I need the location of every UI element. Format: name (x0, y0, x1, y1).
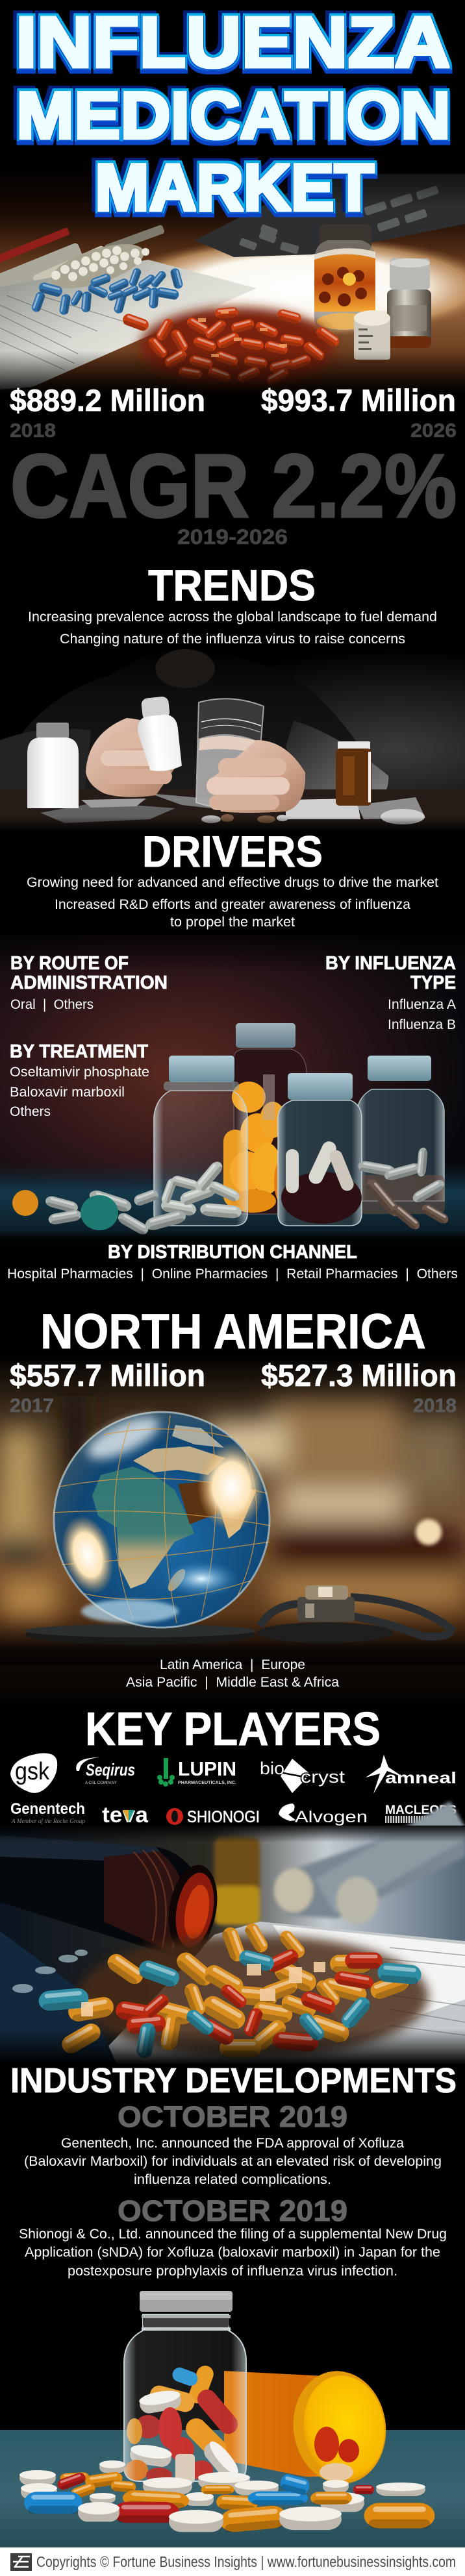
drivers heading: DRIVERS (142, 827, 323, 876)
segment: by route of administration: Oral | Others (10, 997, 94, 1012)
development 1: Genentech, Inc. announced the FDA approval of Xofluza (61, 2136, 404, 2151)
land: Europe (133, 1446, 225, 1475)
segment: by treatment (10, 1041, 149, 1119)
logo: Shionogi: SHIONOGI (187, 1808, 260, 1826)
spilled tablets and capsules (19, 2460, 434, 2533)
globe (25, 1409, 270, 1645)
back jar (234, 1023, 307, 1214)
globe grid (53, 1415, 270, 1623)
segment: by treatment: Baloxavir marboxil (10, 1085, 125, 1100)
segment: by influenza type: BY INFLUENZA (325, 953, 456, 974)
amber capsules (12, 1921, 429, 2059)
image: medicine jars (0, 935, 465, 1246)
left hand (86, 718, 174, 797)
footer bar (0, 2547, 465, 2576)
bokeh background (0, 1396, 465, 1616)
blister packs and pills (40, 793, 425, 824)
development 1 (24, 2100, 442, 2187)
image: pill jar and orange bottle (0, 2291, 465, 2547)
title: INFLUENZA (16, 3, 450, 82)
table (0, 2430, 465, 2547)
icon: syringes (0, 225, 165, 298)
icon: white bottle (27, 723, 79, 808)
teal ball (81, 1195, 118, 1230)
orange pills (223, 1074, 303, 1213)
regions list: Latin America | Europe (160, 1657, 305, 1672)
trends text (28, 610, 437, 647)
drivers text: Growing need for advanced and effective drugs to drive the market (27, 875, 438, 890)
segment: by route of administration: ADMINISTRATION (10, 972, 168, 993)
title: MARKET (95, 151, 374, 225)
pills inside jar (125, 2363, 242, 2483)
logo: Alvogen: Alvogen (295, 1808, 368, 1826)
stat: 2018 market value: 2018 (10, 420, 56, 441)
key players heading: KEY PLAYERS (85, 1703, 381, 1755)
logo: Lupin: LUPIN (178, 1757, 236, 1780)
logo: Genentech: A Member of the Roche Group (11, 1818, 85, 1825)
image: spilled capsules from bottle (0, 1802, 465, 2064)
hero image: desk with pills (0, 149, 465, 415)
development 2: Shionogi & Co., Ltd. announced the filing of a supplemental New Drug (19, 2227, 447, 2242)
development 1: OCTOBER 2019 (118, 2100, 347, 2133)
red capsules (121, 306, 342, 388)
logo: gsk (10, 1753, 57, 1793)
front jar (278, 1073, 362, 1226)
segment: by distribution channel: Hospital Pharmacies | Online Pharmacies | Retail Pharmacies | Others (7, 1267, 458, 1282)
glass jar (124, 2291, 246, 2481)
title (16, 3, 451, 225)
crystals (12, 1950, 88, 1993)
sleeve right (286, 721, 388, 808)
grey-cap bottle (387, 258, 431, 348)
segment: by influenza type (325, 953, 456, 1032)
stat: 2026 market value: $993.7 Million (261, 383, 456, 417)
development 2 (19, 2194, 447, 2279)
development 1: influenza related complications. (134, 2172, 331, 2187)
logo: Macleods (385, 1803, 457, 1823)
title: MEDICATION (16, 79, 451, 153)
right hand (207, 740, 305, 813)
left jar (154, 1056, 247, 1226)
land: Africa (92, 1467, 194, 1589)
logo: BioCryst (260, 1759, 346, 1793)
stethoscope (257, 1585, 451, 1643)
table (0, 789, 465, 831)
orange ball (12, 1190, 38, 1216)
logo: Teva: teva (102, 1803, 149, 1827)
segment: by route of administration (10, 953, 168, 1012)
amber jar (314, 224, 375, 330)
trends text: Changing nature of the influenza virus to raise concerns (60, 632, 405, 647)
drivers text: Increased R&D efforts and greater awareness of influenza (55, 897, 410, 912)
regions list: Asia Pacific | Middle East & Africa (126, 1675, 339, 1690)
development 1: (Baloxavir Marboxil) for individuals at an elevated risk of developing (24, 2154, 442, 2169)
man silhouette (0, 648, 383, 805)
segment: by distribution channel (7, 1242, 458, 1282)
development 2: OCTOBER 2019 (118, 2194, 347, 2227)
segment: by influenza type: Influenza B (388, 1017, 456, 1032)
stat: 2018 market value: $889.2 Million (10, 383, 205, 417)
development 2: postexposure prophylaxis of influenza virus infection. (68, 2264, 397, 2279)
logo: Seqirus: Seqirus (86, 1760, 135, 1779)
stat: 2018 market value (10, 383, 205, 441)
syringes background (214, 1802, 465, 1925)
white pills (46, 235, 149, 297)
logo: Amneal: amneal (385, 1769, 457, 1787)
document paper (0, 260, 257, 390)
stat: 2017 value: $557.7 Million (10, 1358, 205, 1393)
trends heading: TRENDS (148, 561, 316, 610)
image: man with medicine and water (0, 648, 465, 832)
icon: held bottle (134, 695, 182, 773)
blue capsules (31, 267, 184, 316)
segment: by route of administration: BY ROUTE OF (10, 953, 129, 974)
icon: keyboard (195, 174, 465, 257)
stat: 2018 value: 2018 (413, 1395, 457, 1417)
stat: 2018 value: $527.3 Million (261, 1358, 457, 1393)
stat: 2026 market value (261, 383, 457, 441)
image: crystal globe with stethoscope (0, 1354, 465, 1714)
north america heading: NORTH AMERICA (40, 1304, 426, 1359)
scattered capsules (44, 1147, 447, 1237)
logo: Seqirus: A CSL COMPANY (85, 1781, 117, 1785)
logo: Macleods: MACLEODS (385, 1803, 457, 1817)
icon: glass of water (196, 699, 264, 808)
logo: Lupin: PHARMACEUTICALS, INC. (178, 1781, 236, 1785)
stat: 2018 value (261, 1358, 457, 1417)
glare (197, 1443, 265, 1531)
segment: by treatment: Oseltamivir phosphate (10, 1065, 149, 1080)
stat: 2026 market value: 2026 (410, 420, 457, 441)
drivers text: to propel the market (170, 915, 295, 930)
segment: by influenza type: Influenza A (388, 997, 456, 1012)
logo: BioCryst: bio (260, 1759, 284, 1778)
logo: Genentech (10, 1800, 85, 1825)
logo: Genentech: Genentech (10, 1800, 85, 1818)
stat: 2017 value: 2017 (10, 1395, 54, 1417)
icon: Fortune Business Insights logo (10, 2553, 32, 2571)
medical paper (91, 1922, 465, 2064)
logo: Seqirus (76, 1757, 135, 1785)
blue floor left (0, 1931, 117, 2064)
logo: Lupin (157, 1757, 236, 1787)
orange bottle (224, 2365, 393, 2490)
icon: amber bottle (336, 741, 371, 806)
drivers text (27, 875, 438, 930)
bottle (0, 1835, 223, 1961)
logo: gsk: gsk (15, 1758, 50, 1785)
logo: BioCryst: cryst (301, 1767, 346, 1787)
regions list (126, 1657, 339, 1690)
segment: by influenza type: TYPE (410, 972, 456, 993)
logos: key players (10, 1753, 457, 1827)
trends text: Increasing prevalence across the global landscape to fuel demand (28, 610, 437, 625)
sleeve left (0, 728, 91, 799)
CAGR figure: 2019-2026 (177, 525, 288, 549)
segment: by treatment: BY TREATMENT (10, 1041, 148, 1062)
land: Arabia (178, 1481, 220, 1524)
logo: Alvogen (279, 1803, 368, 1826)
stat: 2017 value (10, 1358, 205, 1417)
segment: by treatment: Others (10, 1104, 51, 1119)
logo: Amneal (366, 1755, 457, 1794)
small canister (354, 310, 390, 360)
segment: by distribution channel: BY DISTRIBUTION CHANNEL (108, 1242, 357, 1263)
development 2: Application (sNDA) for Xofluza (baloxavir marboxil) in Japan for the (25, 2245, 440, 2260)
right jar (357, 1056, 445, 1214)
